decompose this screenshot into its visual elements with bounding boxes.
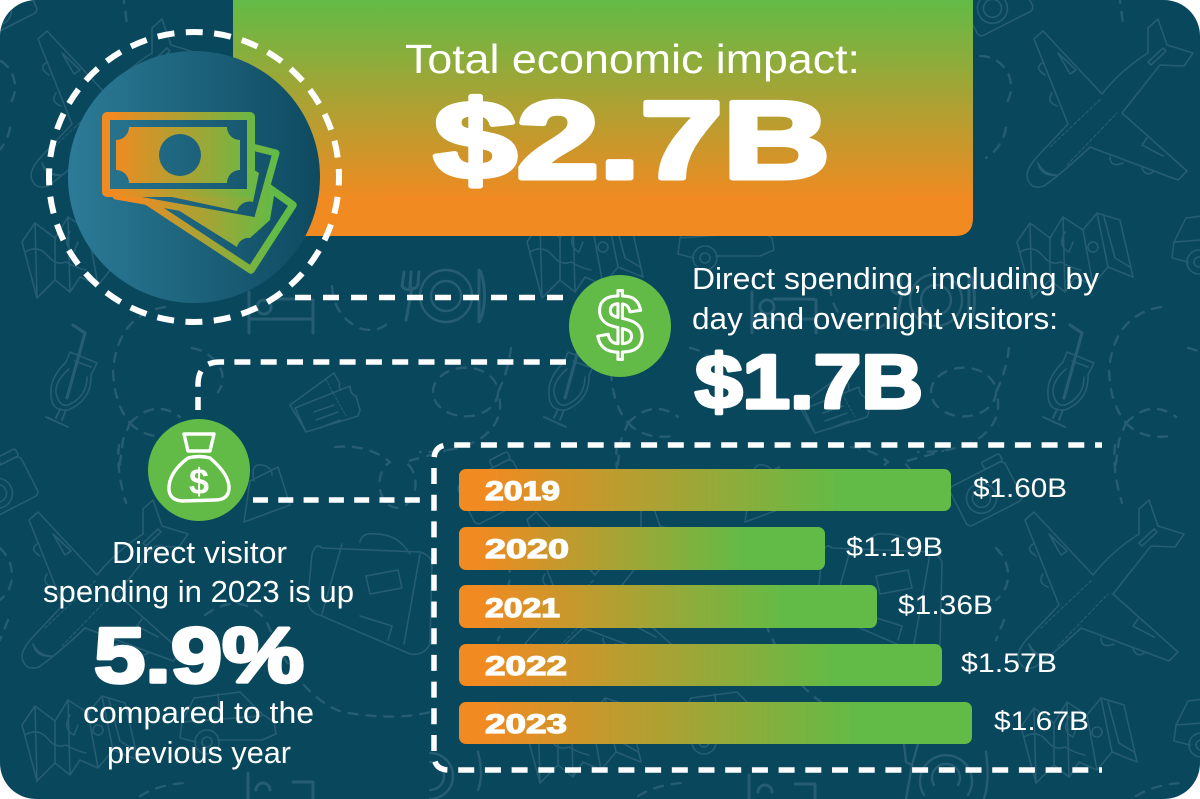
text block: visitor spending up 5.9%: previous year xyxy=(107,735,291,770)
bar: 2019 xyxy=(459,469,1067,511)
bar: 2021: $1.36B xyxy=(898,590,993,620)
icon: money bag in green circle xyxy=(148,419,250,521)
heading: total economic impact: Total economic impact: xyxy=(405,36,860,82)
icon: dollar sign in green circle: $ xyxy=(597,277,643,371)
front bill xyxy=(106,116,251,193)
description: Direct spending, including by xyxy=(692,261,1100,296)
big number: $2.7B: $2.7B xyxy=(434,79,830,202)
icon: dollar sign in green circle xyxy=(569,275,671,377)
bar: 2021: 2021 xyxy=(485,593,560,623)
bar chart: direct spending by year xyxy=(459,469,1089,744)
bar: 2023: $1.67B xyxy=(994,706,1089,736)
bar: 2022: $1.57B xyxy=(961,648,1057,678)
bar: 2019: $1.60B xyxy=(973,473,1067,503)
big number: $1.7B: $1.7B xyxy=(695,340,923,425)
connector: direct spending to money bag xyxy=(198,362,566,410)
middle bill xyxy=(116,147,276,221)
icon: money bag in green circle: $ xyxy=(189,461,209,502)
bar: 2023: 2023 xyxy=(485,709,567,739)
connector: money bag to chart xyxy=(253,497,421,503)
bar: 2019: 2019 xyxy=(485,476,560,506)
text block: visitor spending up 5.9% xyxy=(43,535,354,770)
bar: 2021 xyxy=(459,585,993,628)
teal disc xyxy=(68,51,320,303)
dashed chart frame xyxy=(434,445,1102,770)
text block: direct spending xyxy=(692,261,1100,425)
connector: circle to direct spending xyxy=(295,295,563,300)
text block: direct spending: day and overnight visitors: xyxy=(692,301,1058,336)
back bill xyxy=(145,187,293,270)
panel: total economic impact xyxy=(233,0,973,236)
bar: 2022: 2022 xyxy=(485,651,567,681)
icon: money bills in dashed circle xyxy=(49,32,339,322)
big number: 5.9%: 5.9% xyxy=(94,611,304,699)
bar: 2020: 2020 xyxy=(485,534,569,564)
description bottom: compared to the xyxy=(83,695,314,730)
bar: 2022 xyxy=(459,644,1057,686)
description top: Direct visitor xyxy=(112,535,287,570)
dashed ring xyxy=(49,32,339,322)
text block: visitor spending up 5.9%: spending in 2023 is up xyxy=(43,574,354,609)
bar: 2020: $1.19B xyxy=(846,532,943,562)
bar: 2020 xyxy=(459,527,943,570)
bar: 2023 xyxy=(459,702,1089,744)
